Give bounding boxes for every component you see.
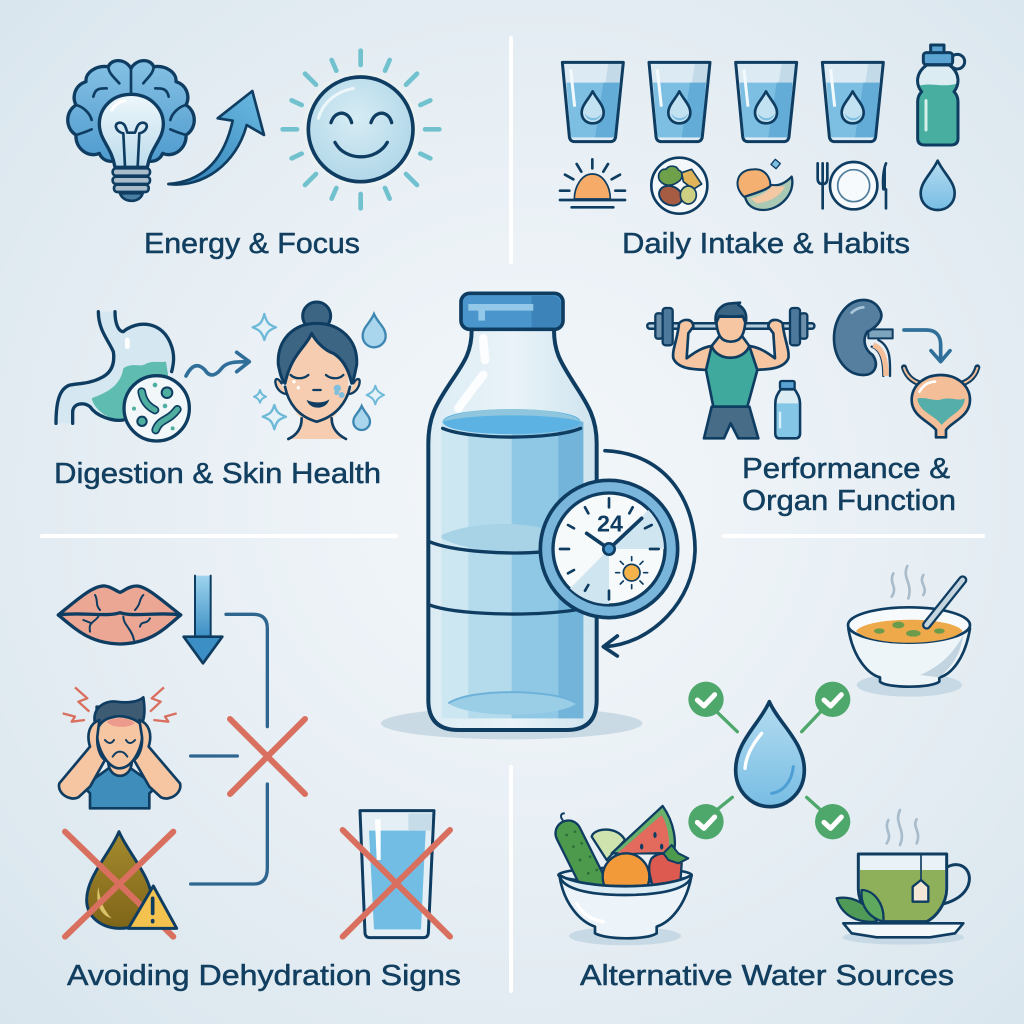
icon: crossed water glass — [343, 811, 450, 938]
heading: digestion and skin health: Digestion & Skin Health — [54, 458, 381, 490]
icons: brain bulb arrow smiley — [68, 51, 439, 208]
icon: headache person — [59, 687, 180, 808]
icon: water drop — [921, 161, 955, 210]
icon: fruit bowl — [558, 806, 692, 945]
icon: small water bottle — [775, 381, 800, 438]
icon: red cross — [230, 719, 305, 794]
icon: dark urine drop with warning — [65, 832, 177, 937]
icons: stomach face — [56, 302, 386, 441]
icon: brain — [68, 61, 194, 161]
divider top — [509, 36, 513, 264]
bottle shadow — [381, 707, 642, 739]
icon: 24-hour clock — [540, 480, 678, 618]
icon: soup bowl — [848, 566, 970, 697]
heading: energy and focus: Energy & Focus — [144, 228, 360, 260]
icon: sparkles and drops — [253, 314, 386, 430]
icon: meal plate — [651, 158, 707, 214]
heading: alternative water sources: Alternative Water Sources — [580, 960, 954, 992]
panel: alternative water sources — [558, 566, 970, 992]
icon: sports bottle — [918, 45, 965, 145]
icon: stomach with microbes — [56, 312, 189, 441]
icons: glasses bottle meals — [560, 45, 965, 214]
panel: energy and focus — [68, 51, 439, 260]
arrow: down — [184, 576, 222, 663]
water bottle — [428, 293, 597, 730]
circular arrow — [603, 451, 695, 656]
icons: symptoms — [58, 576, 450, 938]
icon: smiling face with rays — [283, 51, 439, 208]
icon: four water glasses — [562, 62, 883, 142]
icons: athlete kidney bladder — [650, 300, 977, 438]
icon: bread and bowl — [738, 159, 792, 210]
icon: weightlifter — [650, 303, 812, 438]
panel: digestion and skin health — [54, 302, 386, 490]
icon: central water drop with checks — [688, 682, 850, 839]
central bottle with clock — [381, 293, 695, 739]
heading: performance and organ function: Organ Function — [742, 485, 956, 517]
panel: avoiding dehydration signs — [58, 576, 461, 992]
icon: fork plate knife — [818, 162, 886, 209]
arrow: wavy — [186, 352, 249, 376]
arrow: kidney to bladder — [904, 330, 950, 362]
icon: 24-hour clock: 24 — [597, 510, 623, 536]
icons: drop and foods — [558, 566, 970, 945]
heading: daily intake and habits: Daily Intake & Habits — [622, 228, 910, 260]
icon: woman's face — [275, 302, 360, 439]
heading: avoiding dehydration signs: Avoiding Dehydration Signs — [67, 960, 461, 992]
connector lines — [191, 614, 267, 884]
icon: sunrise — [560, 159, 625, 207]
icon: cracked lips — [58, 586, 181, 644]
panel: performance and organ function — [650, 300, 977, 517]
icon: bladder — [904, 367, 977, 437]
icon: light bulb — [99, 94, 163, 201]
icon: green tea cup — [837, 810, 969, 945]
icon: kidney — [834, 300, 893, 376]
icon: upward arrow — [168, 91, 264, 184]
heading: performance and organ function: Performance & — [742, 453, 950, 485]
heading: performance and organ function — [742, 453, 956, 517]
panel: daily intake and habits — [560, 45, 965, 260]
